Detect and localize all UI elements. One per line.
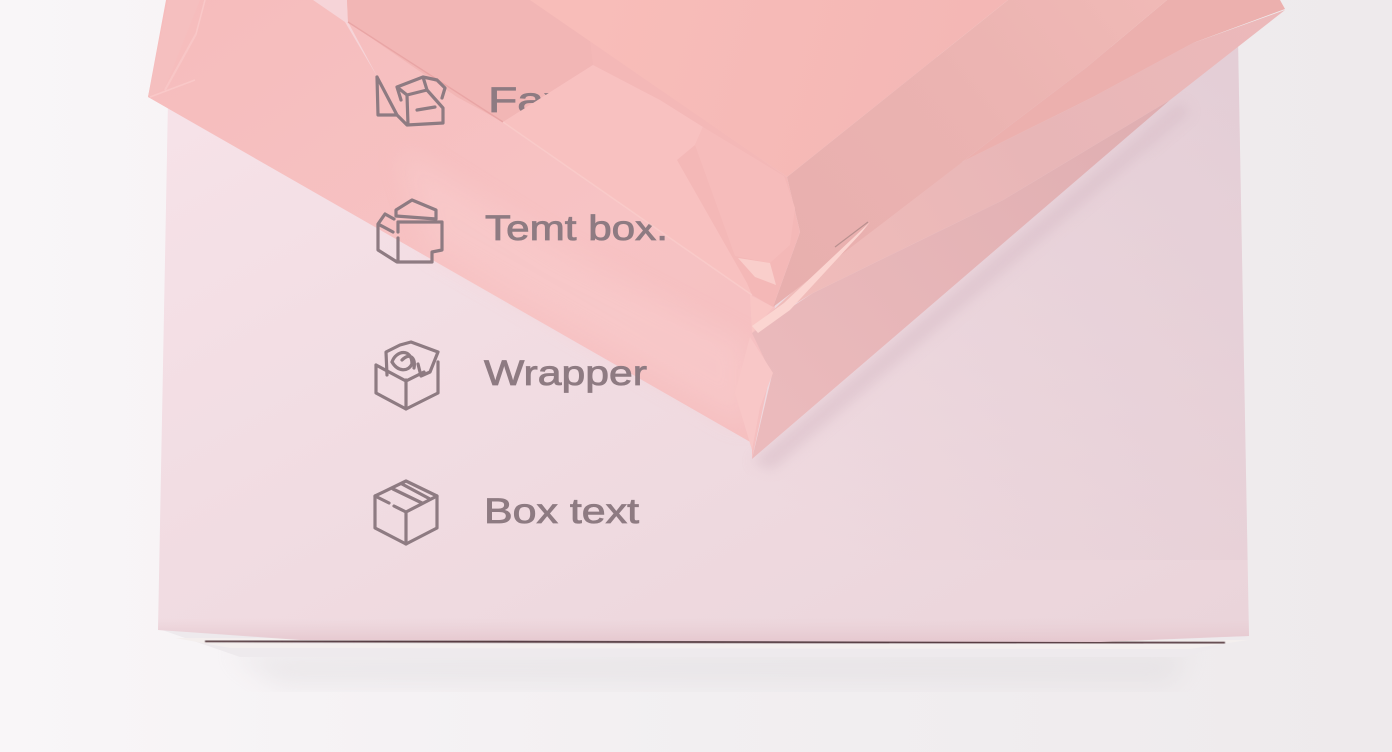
- list item: Wrapper label: Wrapper: [484, 354, 647, 393]
- list item: Fax label: Fax: [488, 81, 569, 120]
- upper band between parcel and mid band: [773, 0, 1285, 307]
- list item: Box text label: Box text: [484, 492, 639, 531]
- lower wrapper: left side: [148, 0, 775, 459]
- parcel cast shadow: [752, 102, 1190, 470]
- lower band: outer dark strip: [752, 100, 1170, 459]
- list item: Box text icon: [375, 481, 437, 544]
- fold crease: [348, 22, 503, 122]
- lower wrapper: soft light area: [400, 150, 745, 425]
- flap edge highlight: [503, 122, 752, 295]
- box front edge: [162, 630, 1250, 657]
- lower band: mid light band: [752, 10, 1285, 330]
- upper parcel: light flap covering the labels: [503, 65, 752, 295]
- list item: Fax icon: [377, 77, 445, 125]
- upper wrapper darker area behind the Fax label: [347, 0, 640, 122]
- inner fold detail near the parcel corner: [752, 222, 870, 333]
- photo scene: pink box with wrapped parcel: [148, 0, 1285, 692]
- tip of the corner fold: [750, 295, 773, 333]
- list item: Tent box label: Temt box.: [485, 209, 668, 248]
- upper parcel: region between flap and ridge: [590, 40, 800, 307]
- box shadow on surface: [230, 652, 1190, 685]
- upper parcel: corner crystal: [738, 258, 776, 285]
- upper parcel: right side face: [773, 0, 1167, 307]
- list item: Wrapper icon: [376, 342, 438, 409]
- upper parcel: flap shard: [695, 127, 795, 263]
- white fold strip: [313, 0, 378, 78]
- box lid: [150, 40, 1260, 642]
- corner fold of the lower wrapper: [735, 337, 773, 450]
- list item: Tent box icon: [378, 200, 442, 262]
- left wrapper outer fold: [148, 0, 205, 97]
- upper parcel: top face: [530, 0, 1008, 177]
